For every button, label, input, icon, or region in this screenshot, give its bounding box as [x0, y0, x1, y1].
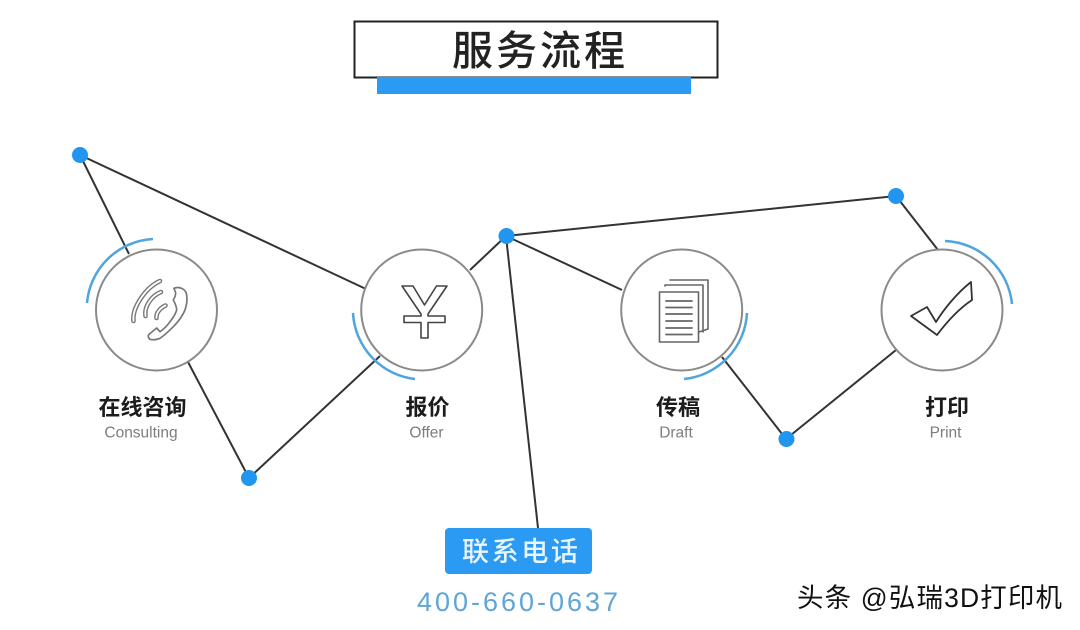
- step: draft: [621, 250, 747, 442]
- icon: check mark: [911, 282, 972, 335]
- accent arc: [87, 239, 153, 303]
- accent arc: [945, 241, 1012, 304]
- circle: [96, 250, 217, 370]
- accent arc: [353, 313, 415, 379]
- sublabel: Print: [930, 424, 962, 442]
- circle: [361, 250, 482, 370]
- icon: phone: [133, 281, 187, 340]
- icon: yuan sign: [402, 286, 447, 338]
- circle: [882, 250, 1002, 370]
- circle: [621, 250, 742, 370]
- title text: 服务流程: [452, 28, 625, 74]
- step: offer: [353, 250, 482, 442]
- icon: documents: [660, 280, 708, 342]
- label: 在线咨询: [98, 395, 187, 420]
- sublabel: Draft: [659, 424, 693, 442]
- title banner: [354, 22, 718, 94]
- sublabel: Offer: [409, 424, 444, 442]
- connector lines: [80, 155, 938, 528]
- watermark: 头条 @弘瑞3D打印机: [797, 583, 1062, 613]
- phone number: 400-660-0637: [417, 587, 618, 617]
- accent arc: [684, 313, 747, 379]
- label: 报价: [405, 395, 450, 420]
- step: consulting: [87, 239, 217, 442]
- sublabel: Consulting: [104, 424, 178, 442]
- contact button: [445, 528, 592, 574]
- label: 传稿: [656, 395, 700, 420]
- button text: 联系电话: [462, 537, 578, 567]
- connector dots: [72, 147, 904, 486]
- step: print: [882, 241, 1012, 442]
- label: 打印: [925, 395, 969, 420]
